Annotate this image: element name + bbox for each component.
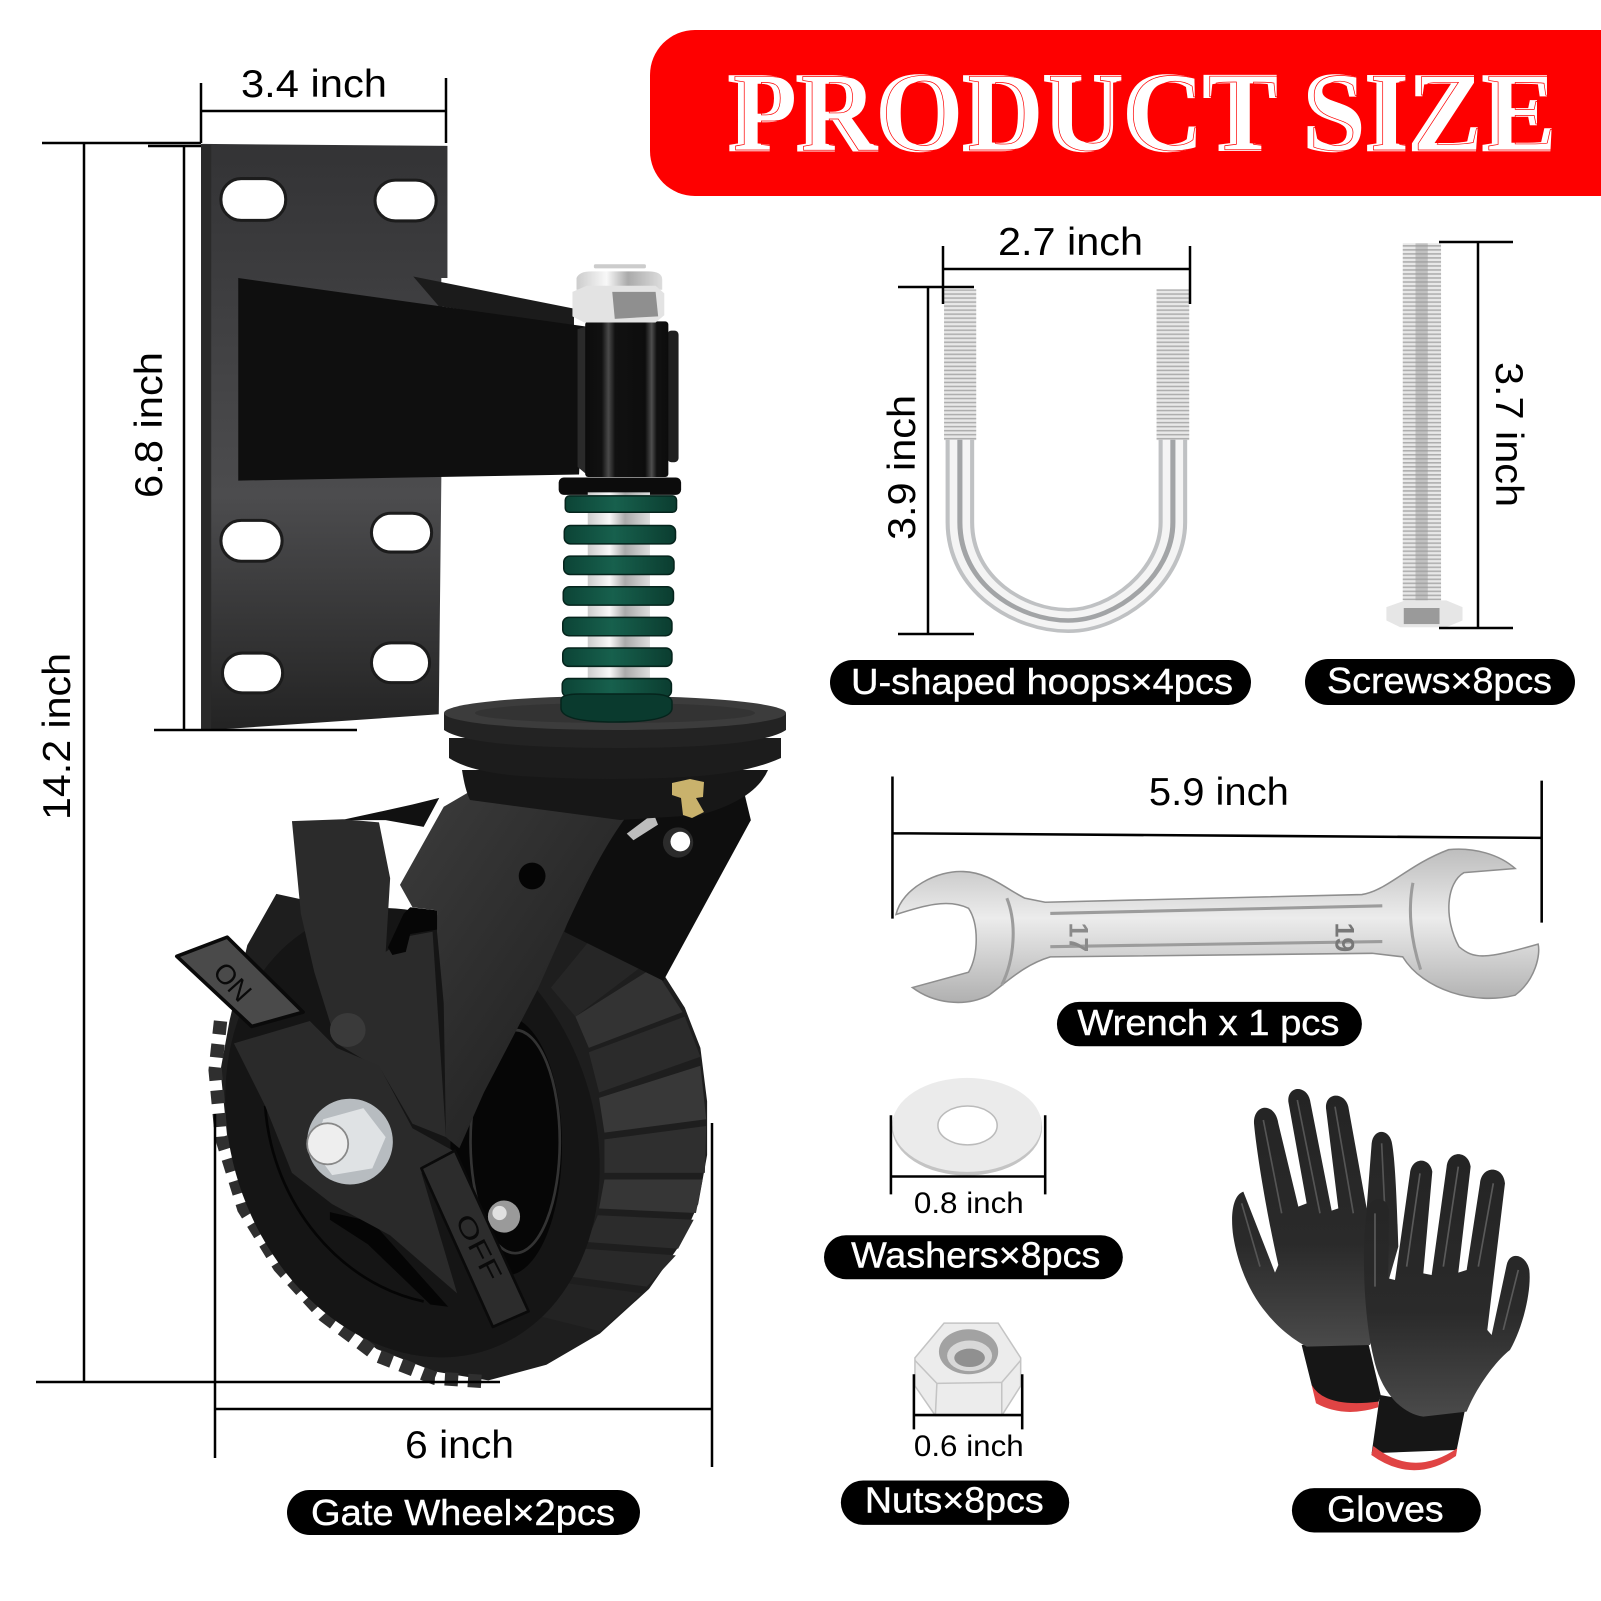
dimension: 6.8 inch bracket height xyxy=(128,146,357,730)
dimension: 3.9 inch xyxy=(881,287,974,634)
dimension: 6.8 inch bracket height: 6.8 inch xyxy=(128,352,171,498)
label: nuts xyxy=(841,1480,1069,1525)
washer xyxy=(892,1078,1042,1175)
label: wrench: Wrench x 1 pcs xyxy=(1077,1003,1339,1043)
bracket plate xyxy=(201,144,447,731)
dimension: 5.9 inch xyxy=(892,770,1542,923)
gloves xyxy=(1232,1089,1530,1470)
hinge cylinder and nut xyxy=(559,264,681,495)
OFF pedal: OFF xyxy=(449,1210,506,1286)
rear fork flange xyxy=(564,787,751,981)
dimension: 0.8 inch xyxy=(891,1115,1045,1220)
dimension: 0.6 inch xyxy=(914,1374,1024,1463)
dimension: 2.7 inch: 2.7 inch xyxy=(998,221,1143,264)
ON pedal xyxy=(177,937,303,1026)
coil spring xyxy=(562,492,677,712)
dimension: 0.8 inch: 0.8 inch xyxy=(914,1187,1024,1220)
dimension: 2.7 inch xyxy=(943,221,1190,304)
tire xyxy=(215,894,707,1382)
dimension: 5.9 inch: 5.9 inch xyxy=(1149,770,1289,814)
label: gate wheel: Gate Wheel×2pcs xyxy=(311,1492,615,1533)
caster top plate and housing xyxy=(444,694,786,820)
grease nipple xyxy=(672,779,704,818)
screw xyxy=(1386,243,1463,627)
back glove xyxy=(1232,1089,1398,1412)
swing arm xyxy=(238,277,587,481)
label: gloves xyxy=(1292,1488,1481,1533)
dimension: 14.2 inch total height xyxy=(36,143,500,1382)
dimension: 3.7 inch xyxy=(1439,242,1530,628)
dimension: 3.7 inch: 3.7 inch xyxy=(1487,362,1530,507)
dimension: 6 inch wheel diameter: 6 inch xyxy=(405,1424,514,1467)
dimension: 3.4 inch bracket width: 3.4 inch xyxy=(241,63,387,106)
brake plate xyxy=(234,1013,457,1293)
title text: PRODUCT SIZE xyxy=(728,51,1556,175)
dimension: 14.2 inch total height: 14.2 inch xyxy=(36,653,79,820)
dimension: 6 inch wheel diameter xyxy=(215,1114,712,1467)
label: screws: Screws×8pcs xyxy=(1327,660,1552,701)
label: washers: Washers×8pcs xyxy=(851,1235,1100,1275)
title banner xyxy=(650,30,1601,196)
wrench: 19 xyxy=(1329,923,1359,952)
label: nuts: Nuts×8pcs xyxy=(865,1481,1044,1521)
panel: caster wheel xyxy=(164,787,751,1411)
fork and brake latch xyxy=(292,791,640,1148)
axle bolt xyxy=(307,1099,393,1184)
ON pedal: ON xyxy=(207,956,258,1008)
sidewall and hub xyxy=(164,855,661,1411)
label: u-shaped hoops: U-shaped hoops×4pcs xyxy=(851,661,1233,702)
u-shaped hoop xyxy=(944,289,1189,620)
dimension: 3.9 inch: 3.9 inch xyxy=(881,395,924,540)
panel: accessories xyxy=(824,770,1542,1533)
title text: PRODUCT SIZE xyxy=(733,51,1561,175)
wrench xyxy=(896,849,1539,1002)
dimension: 0.6 inch: 0.6 inch xyxy=(914,1430,1024,1463)
front glove xyxy=(1364,1154,1530,1470)
label: gloves: Gloves xyxy=(1327,1489,1444,1529)
panel: gate wheel mounting bracket xyxy=(201,144,681,731)
nut xyxy=(915,1323,1021,1416)
wrench: 17 xyxy=(1064,923,1094,952)
OFF pedal xyxy=(421,1151,529,1327)
dimension: 3.4 inch bracket width xyxy=(201,63,446,143)
